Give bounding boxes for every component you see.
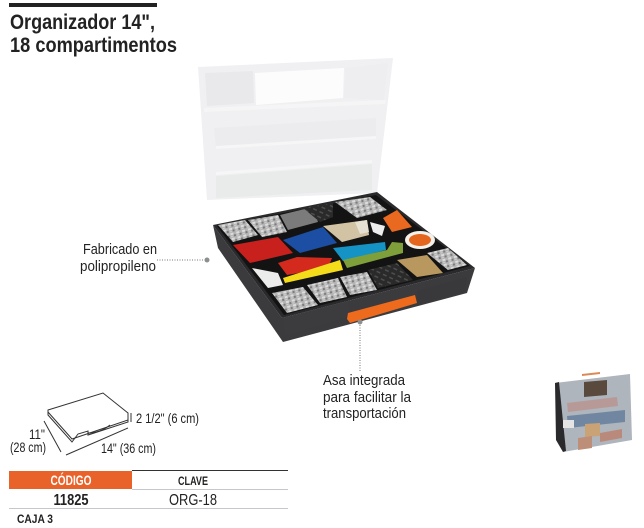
dimension labels: 11" xyxy=(29,426,45,442)
callout: handle: transportación xyxy=(323,405,406,422)
organizer box with compartments xyxy=(213,192,475,342)
box quantity: CAJA 3 xyxy=(17,512,53,526)
orange handle xyxy=(283,277,467,336)
title: 18 compartimentos xyxy=(10,34,177,57)
rear row of compartments xyxy=(218,197,412,242)
callout: material: Fabricado en xyxy=(83,241,157,258)
table header xyxy=(9,470,288,490)
open transparent lid xyxy=(198,58,393,200)
table row xyxy=(9,492,288,509)
callout: material xyxy=(80,241,210,275)
dimension labels: 14" (36 cm) xyxy=(101,440,156,456)
dimensions diagram xyxy=(10,393,199,456)
dimension labels xyxy=(10,410,199,456)
callout: handle xyxy=(323,320,412,422)
table row: ORG-18 xyxy=(169,492,217,509)
table header: CLAVE xyxy=(178,474,208,488)
title: Organizador 14", xyxy=(10,11,155,34)
icon: box outline xyxy=(44,393,131,455)
product table xyxy=(9,470,288,526)
callout: material: polipropileno xyxy=(80,258,156,275)
dimension labels: 2 1/2" (6 cm) xyxy=(136,410,199,426)
front row of compartments xyxy=(272,248,467,313)
table row: 11825 xyxy=(54,492,89,509)
dimension labels: (28 cm) xyxy=(10,439,46,455)
middle row of compartments xyxy=(233,227,403,288)
callout: handle: para facilitar la xyxy=(323,389,412,406)
product thumbnail xyxy=(555,372,632,452)
title xyxy=(9,3,177,57)
box top rim xyxy=(213,192,475,318)
box outer side walls xyxy=(213,225,475,342)
callout: handle: Asa integrada xyxy=(323,372,406,389)
bowl of orange parts xyxy=(405,231,435,249)
table header: CÓDIGO xyxy=(50,471,92,488)
